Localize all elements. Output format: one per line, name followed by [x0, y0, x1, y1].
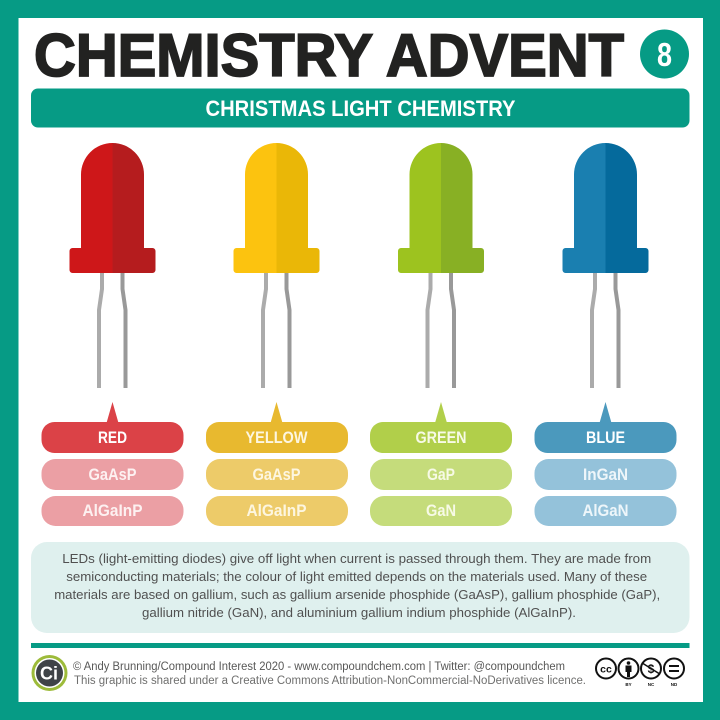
explanation panel: gallium nitride (GaN), and aluminium gallium indium phosphide (AlGaInP). — [142, 605, 576, 620]
icon: Creative Commons licence badges: ND — [671, 682, 678, 687]
LED: blue — [562, 143, 648, 388]
column: blue labels — [534, 402, 676, 526]
column: red labels — [42, 402, 184, 526]
column: red labels: RED — [98, 429, 127, 447]
column: yellow labels: GaAsP — [252, 466, 300, 484]
column: yellow labels: YELLOW — [246, 429, 308, 447]
column: red labels: GaAsP — [88, 466, 136, 484]
subtitle banner — [31, 88, 690, 128]
footer credit text — [73, 661, 586, 687]
title: CHEMISTRY ADVENT — [34, 22, 624, 89]
LED: green — [398, 143, 484, 388]
footer rule — [31, 643, 690, 648]
column: green labels: GaN — [426, 502, 456, 520]
column: blue labels: InGaN — [583, 466, 628, 484]
day number badge — [640, 30, 689, 78]
explanation panel — [31, 542, 690, 633]
LED: red — [70, 143, 156, 388]
subtitle banner: CHRISTMAS LIGHT CHEMISTRY — [206, 96, 516, 121]
day number badge: 8 — [657, 36, 672, 73]
icon: Compound Interest logo — [32, 655, 68, 691]
explanation panel: semiconducting materials; the colour of light emitted depends on the materials used. Many of these — [66, 569, 647, 584]
footer credit text: © Andy Brunning/Compound Interest 2020 - www.compoundchem.com | Twitter: @compoundchem — [73, 661, 565, 673]
column: yellow labels — [206, 402, 348, 526]
icon: Creative Commons licence badges: NC — [648, 682, 655, 687]
footer credit text: This graphic is shared under a Creative Commons Attribution-NonCommercial-NoDerivatives licence. — [74, 675, 586, 687]
LED: yellow — [234, 143, 320, 388]
column: red labels: AlGaInP — [82, 502, 142, 520]
column: green labels: GREEN — [416, 429, 466, 447]
icon: Creative Commons licence badges: BY — [625, 682, 632, 687]
explanation panel: materials are based on gallium, such as gallium arsenide phosphide (GaAsP), gallium phosphide (GaP), — [54, 587, 660, 602]
column: yellow labels: AlGaInP — [246, 502, 306, 520]
explanation panel: LEDs (light-emitting diodes) give off light when current is passed through them. They are made from — [62, 551, 651, 566]
column: blue labels: AlGaN — [582, 502, 628, 520]
icon: Creative Commons licence badges: $ — [648, 662, 655, 676]
column: green labels: GaP — [427, 466, 455, 484]
icon: Compound Interest logo: Ci — [40, 664, 58, 684]
icon: Creative Commons licence badges: cc — [600, 664, 612, 676]
column: blue labels: BLUE — [586, 429, 625, 447]
icon: Creative Commons licence badges — [596, 658, 684, 687]
column: green labels — [370, 402, 512, 526]
